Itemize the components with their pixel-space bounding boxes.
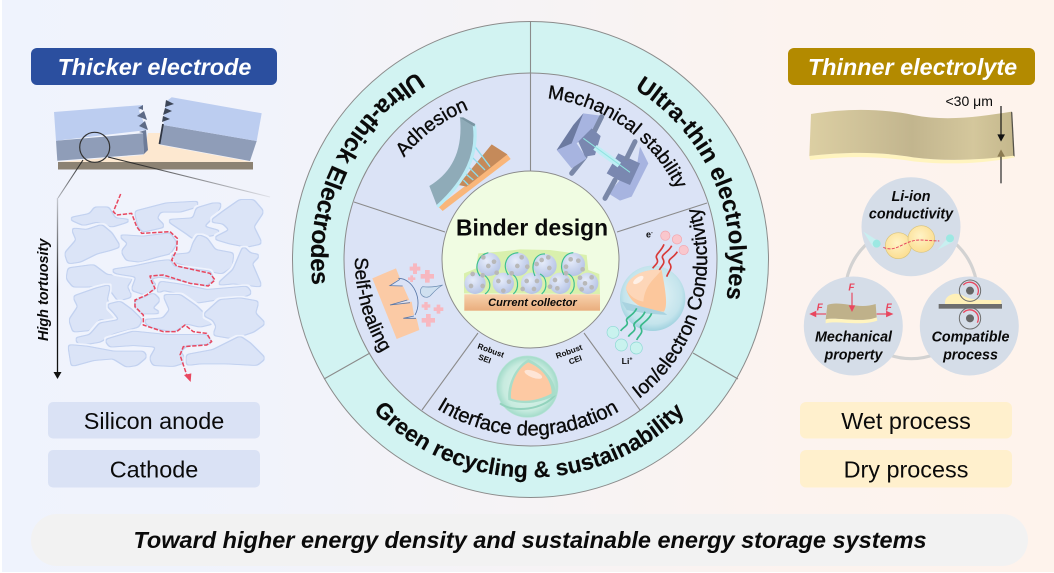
- icon: ion and electron conduction particle: -: [651, 230, 653, 236]
- ring label: ultra-thick electrodes: Ultra-thick Electrodes: [310, 74, 426, 284]
- label: wet process: [800, 402, 1012, 438]
- label: robust CEI: Robust: [555, 343, 584, 361]
- current collector: [464, 294, 600, 311]
- bottom banner: [31, 514, 1028, 566]
- segment label: mechanical stability: Mechanical stability: [548, 85, 686, 186]
- segment label: interface degradation: Interface degradation: [438, 397, 618, 440]
- thin electrolyte film: [809, 106, 1015, 183]
- icon: self-healing: [372, 263, 443, 339]
- heading: thicker electrode: [31, 48, 277, 85]
- icon: adhesion film: [429, 117, 511, 211]
- bottom banner: Toward higher energy density and sustainable energy storage systems: [133, 527, 927, 553]
- label: dry process: [800, 450, 1012, 488]
- node: compatible process: [920, 276, 1019, 376]
- segment label: ion/electron conductivity: Ion/electron Conductivity: [632, 210, 708, 398]
- ring label: ultra-thin electrolytes: Ultra-thin electrolytes: [638, 76, 747, 300]
- label: cathode: [48, 450, 260, 488]
- label: cathode: Cathode: [110, 456, 198, 482]
- heading: thinner electrolyte: [788, 48, 1035, 85]
- node: mechanical property: F: [817, 303, 824, 314]
- illustration: active particles with binder: [464, 249, 600, 294]
- thickness label: <30 μm: [946, 93, 993, 109]
- property triangle ring: [845, 227, 977, 359]
- node: mechanical property: F: [848, 283, 855, 294]
- label: robust CEI: CEI: [568, 354, 583, 367]
- cracked electrode illustration: [54, 97, 262, 170]
- label: robust SEI: [473, 342, 506, 369]
- node: compatible process: process: [942, 347, 998, 363]
- node: mechanical property: F: [886, 303, 893, 314]
- icon: ion and electron conduction particle: e: [646, 229, 651, 239]
- label: robust CEI: [555, 343, 587, 370]
- icon: ion and electron conduction particle: +: [629, 357, 632, 363]
- node: mechanical property: property: [824, 347, 884, 363]
- ring label: green recycling: Green recycling & sustainability: [376, 403, 683, 482]
- porous particles with ion path: [65, 194, 265, 382]
- node: compatible process: Compatible: [932, 330, 1009, 346]
- panel: thinner electrolyte: [788, 48, 1035, 488]
- label: silicon anode: Silicon anode: [84, 408, 224, 434]
- outer ring: [292, 22, 768, 498]
- central wheel diagram: [292, 21, 769, 498]
- middle ring: [344, 73, 717, 446]
- label: dry process: Dry process: [844, 456, 968, 482]
- label: silicon anode: [48, 402, 260, 438]
- tortuosity axis arrow: [54, 198, 62, 379]
- label: high tortuosity: High tortuosity: [36, 238, 52, 341]
- node: mechanical property: Mechanical: [815, 330, 893, 346]
- hub title: Binder design: [456, 214, 608, 240]
- node: li-ion conductivity: Li-ion: [892, 189, 931, 205]
- label: robust SEI: Robust: [476, 342, 506, 360]
- node: li-ion conductivity: conductivity: [869, 206, 954, 222]
- magnifier with zoom lines: [58, 132, 270, 198]
- current collector: Current collector: [488, 297, 578, 309]
- icon: interface particle with SEI and CEI: [497, 356, 558, 417]
- icon: ion and electron conduction particle: [607, 229, 688, 366]
- label: wet process: Wet process: [841, 408, 971, 434]
- node: mechanical property: [804, 276, 903, 376]
- segment label: adhesion: Adhesion: [397, 101, 468, 158]
- segment label: self-healing: Self-healing: [354, 258, 390, 353]
- node: li-ion conductivity: [862, 177, 960, 276]
- heading: thinner electrolyte: Thinner electrolyte: [808, 54, 1017, 80]
- label: robust SEI: SEI: [477, 353, 492, 365]
- icon: ion and electron conduction particle: Li: [622, 356, 629, 366]
- center hub: binder design: [442, 171, 619, 348]
- heading: thicker electrode: Thicker electrode: [58, 54, 251, 80]
- panel: thicker electrode: [31, 48, 277, 488]
- icon: mechanical stability grips: [557, 113, 648, 201]
